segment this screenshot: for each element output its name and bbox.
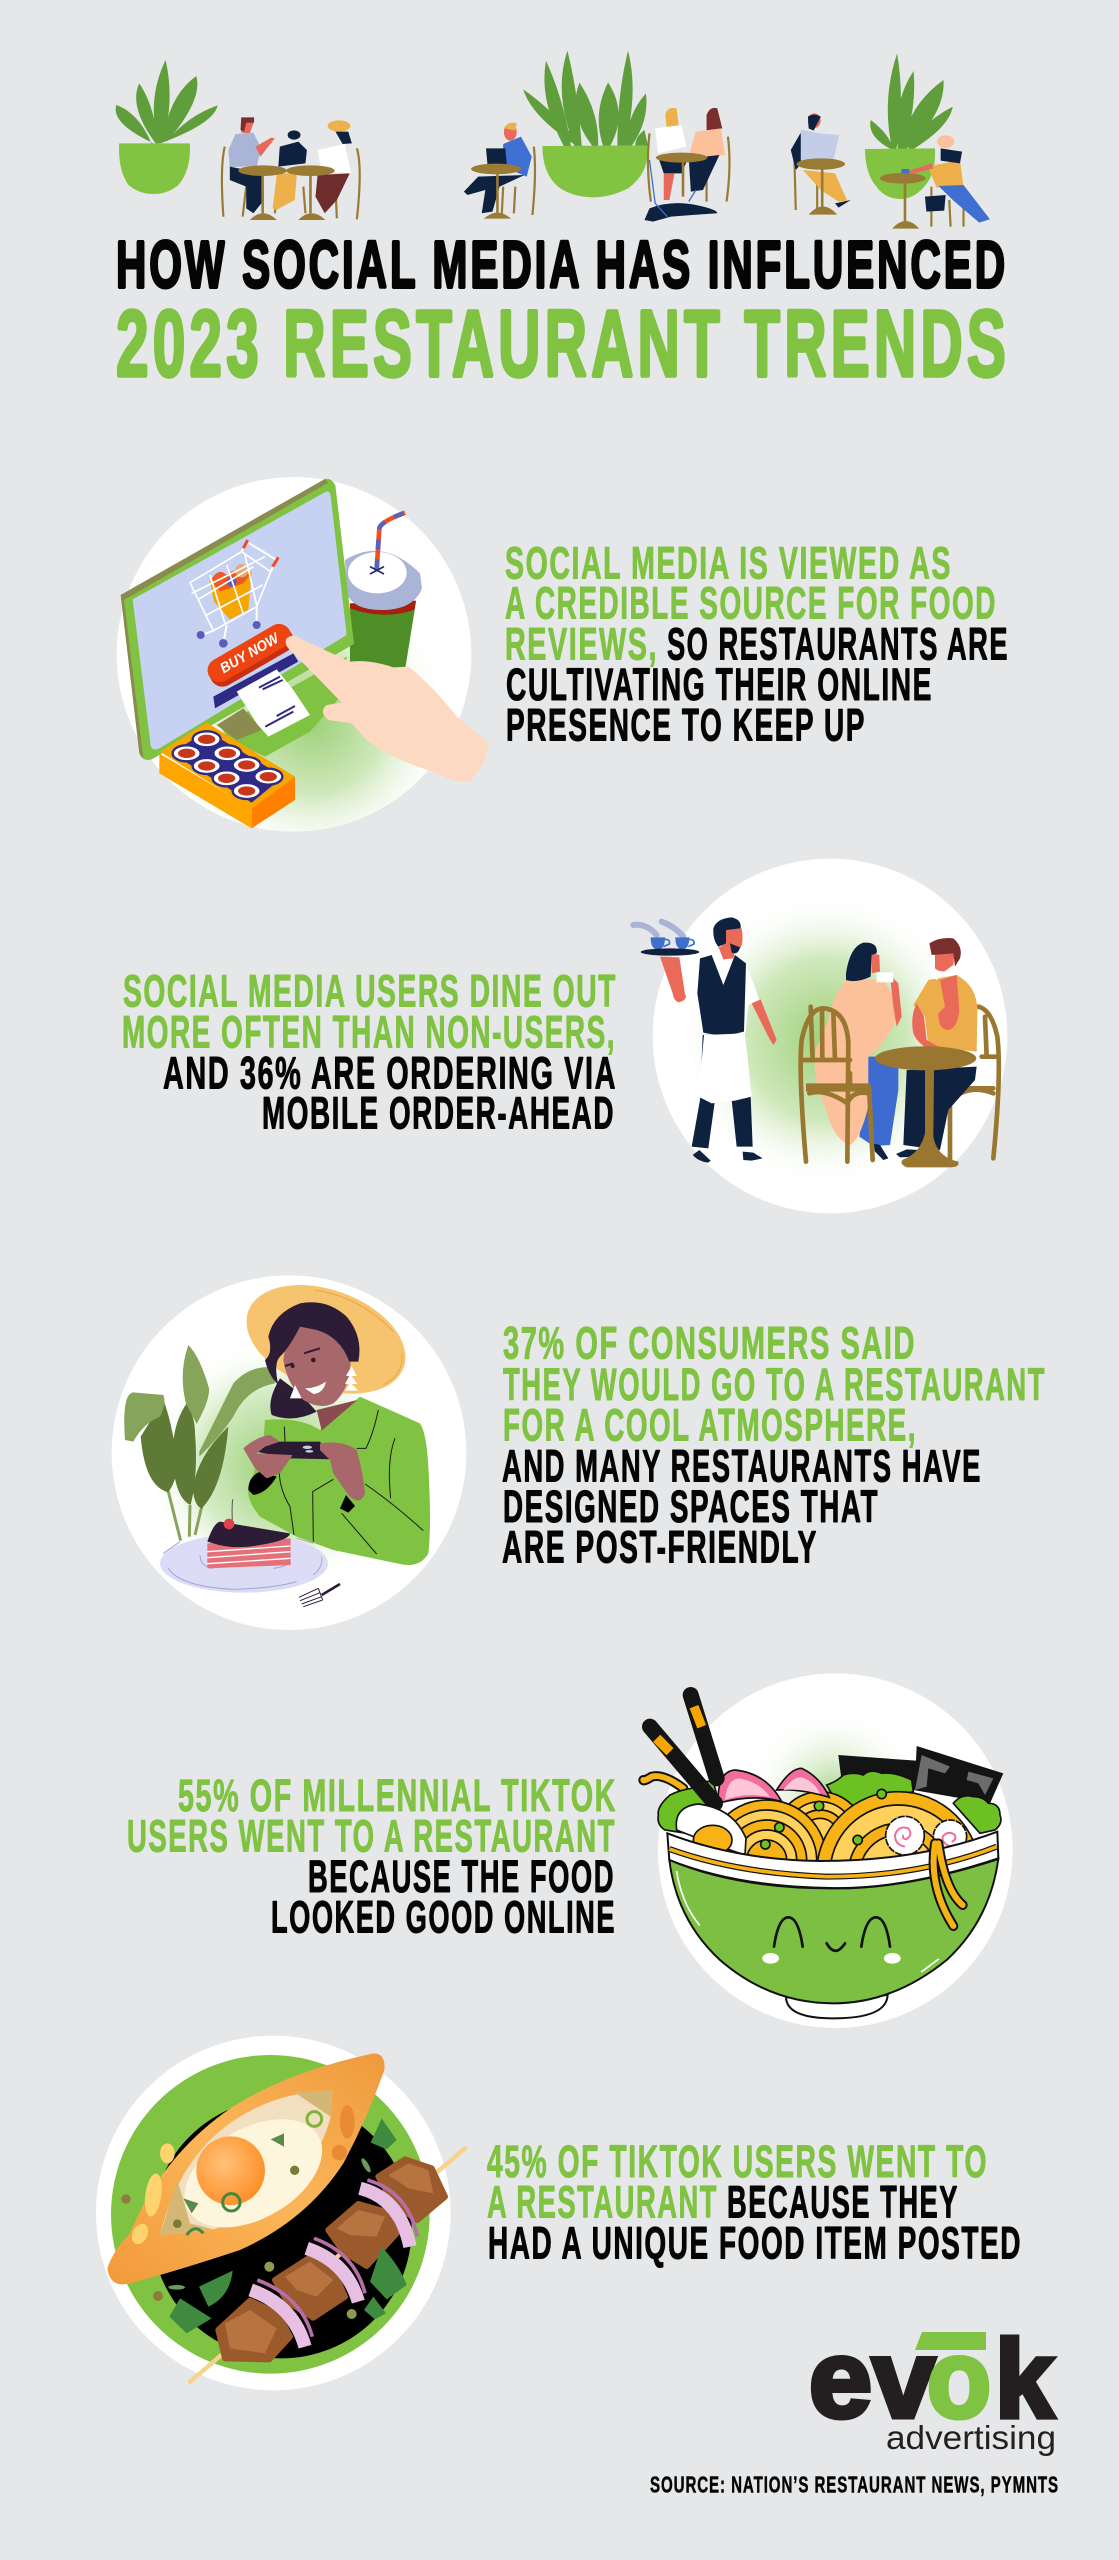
logo macron bar: [915, 2332, 986, 2350]
text block 2: MOBILE ORDER-AHEAD: [262, 1088, 615, 1138]
people: person with laptop: [464, 123, 535, 219]
icon: bowl body with face: [669, 1859, 998, 2018]
text block 4: BECAUSE THE FOOD: [308, 1851, 615, 1902]
receipt: [237, 669, 310, 737]
text block 5: BECAUSE THEY: [727, 2176, 959, 2228]
logo wordmark: o: [927, 2318, 991, 2441]
icon: shopping cart: [190, 540, 278, 648]
icon: plant: [124, 1345, 275, 1541]
people: group at two tables: [222, 117, 360, 220]
text block 2: SOCIAL MEDIA USERS DINE OUT: [123, 966, 617, 1016]
text block 5: [487, 2136, 1022, 2268]
dark plate center: [152, 2098, 412, 2358]
icon: plant center: [523, 51, 648, 197]
text block 1: [505, 538, 1009, 750]
logo wordmark: [809, 2318, 1055, 2441]
icon: chopsticks: [650, 1695, 717, 1803]
title: [116, 228, 1010, 397]
text block 4: USERS WENT TO A RESTAURANT: [127, 1810, 616, 1862]
text block 4: 55% OF MILLENNIAL TIKTOK: [178, 1770, 617, 1821]
icon: bowl rim: [667, 1832, 998, 1888]
logo wordmark: ev: [809, 2318, 935, 2441]
icon: woman with phone: [243, 1302, 430, 1565]
text block 3: [502, 1318, 1046, 1572]
icon: napkin and fork: [299, 1565, 389, 1607]
icon: monitor: [121, 479, 354, 760]
icon: cake on plate: [160, 1499, 328, 1593]
card slot: [213, 653, 298, 708]
logo subline: advertising: [886, 2419, 1056, 2456]
icon: parsley leaves: [121, 2118, 407, 2333]
text block 2: [122, 966, 617, 1138]
text block 1: REVIEWS,: [505, 618, 658, 670]
logo wordmark: k: [995, 2318, 1055, 2441]
people: man reading newspaper: [791, 113, 851, 215]
green plate: [111, 2055, 430, 2374]
icon: noodle strand: [643, 1776, 683, 1788]
badge circle: [96, 2036, 451, 2390]
buy now button: [203, 620, 298, 691]
icon: hanging noodles: [934, 1843, 963, 1926]
icon: sushi box: [159, 723, 295, 828]
text block 5: A RESTAURANT: [487, 2176, 718, 2228]
panel 2: waiter and couple illustration: [633, 859, 1007, 1213]
logo: evok advertising: [809, 2318, 1056, 2456]
icon: skewer: [190, 2148, 465, 2382]
icon: khachapuri bread with egg: [107, 2053, 385, 2284]
icon: seated man and table: [875, 938, 999, 1167]
icon: noodle mounds: [728, 1788, 974, 1860]
icon: drink cup: [345, 513, 422, 670]
icon: seated woman on chair: [801, 943, 902, 1162]
buy now button: BUY NOW: [218, 630, 283, 677]
people: two women with dog: [644, 108, 729, 222]
icon: pink fish cakes: [718, 1768, 829, 1803]
text block 4: LOOKED GOOD ONLINE: [271, 1892, 616, 1942]
text block 4: [127, 1770, 617, 1942]
text block 1: PRESENCE TO KEEP UP: [506, 700, 866, 750]
icon: plant left: [116, 60, 218, 194]
icon: lettuce: [658, 1771, 1001, 1833]
text block 3: ARE POST-FRIENDLY: [502, 1522, 818, 1572]
panel 4: ramen bowl illustration: [643, 1673, 1013, 2028]
icon: plant right: [865, 53, 953, 199]
people: person with tablet: [880, 135, 990, 229]
text block 2: AND 36% ARE ORDERING VIA: [163, 1048, 617, 1098]
badge circle: [112, 1275, 466, 1630]
panel 3: woman photographing cake illustration: [112, 1265, 466, 1630]
text block 2: MORE OFTEN THAN NON-USERS,: [122, 1006, 616, 1058]
badge circle: [658, 1673, 1013, 2028]
icon: boiled egg: [676, 1804, 746, 1855]
badge circle: [653, 859, 1007, 1213]
icon: narutomaki: [886, 1816, 967, 1855]
icon: nori: [838, 1746, 1003, 1803]
icon: waiter with tray: [633, 917, 777, 1163]
header illustration: cafe scene with plants and people: [116, 51, 990, 229]
text block 3: DESIGNED SPACES THAT: [503, 1481, 879, 1532]
badge circle: [117, 477, 471, 832]
icon: sun hat: [231, 1265, 421, 1414]
panel 1: computer ordering illustration: [117, 477, 488, 832]
icon: hand pointing: [286, 636, 488, 782]
panel 5: khachapuri and skewer illustration: [96, 2036, 465, 2390]
